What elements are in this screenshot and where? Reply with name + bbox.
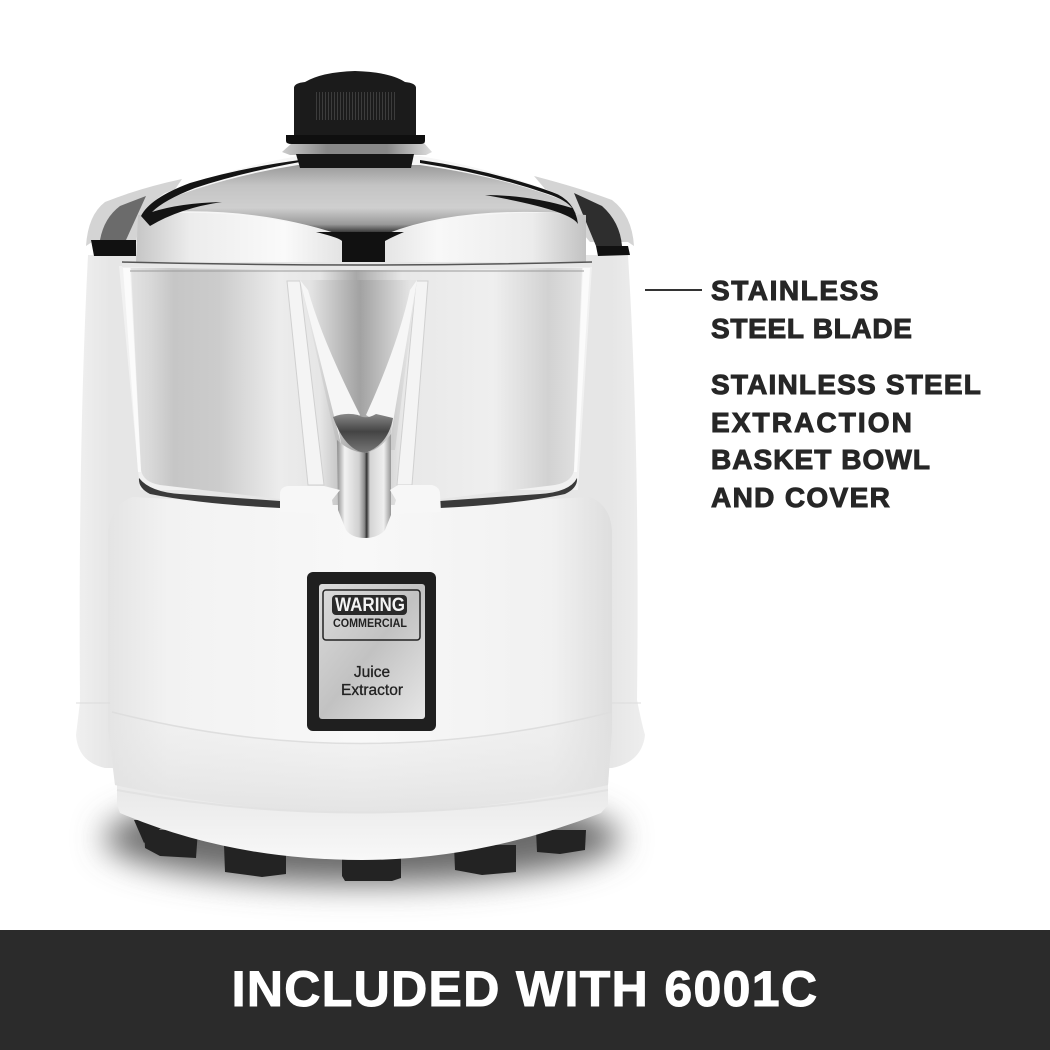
spout tube xyxy=(337,434,391,538)
label: stainless steel blade xyxy=(711,275,913,344)
dark block under knob xyxy=(296,154,414,168)
badge xyxy=(307,572,436,731)
base cylinder xyxy=(117,760,608,860)
front body xyxy=(108,497,612,812)
glass bowl edges xyxy=(119,266,592,490)
badge: Juice xyxy=(354,664,390,681)
floor shadow xyxy=(104,792,620,884)
side housing xyxy=(76,255,645,768)
banner heading: INCLUDED WITH 6001C xyxy=(232,961,818,1017)
badge: COMMERCIAL xyxy=(333,616,407,630)
logo pill xyxy=(332,595,407,615)
label: stainless steel blade: STAINLESS xyxy=(711,275,880,306)
label: stainless steel blade: STEEL BLADE xyxy=(711,312,913,344)
wing clips xyxy=(91,240,136,256)
lower body band xyxy=(110,712,612,812)
steel bowl xyxy=(131,268,582,505)
label: basket bowl and cover: BASKET BOWL xyxy=(711,444,931,475)
label: basket bowl and cover: EXTRACTION xyxy=(711,406,914,438)
white tabs xyxy=(280,486,340,514)
label: basket bowl and cover: AND COVER xyxy=(711,482,891,512)
centre black notch xyxy=(316,232,404,262)
spout channel xyxy=(287,280,428,485)
label: basket bowl and cover: STAINLESS STEEL xyxy=(711,369,982,400)
lid lower lobes xyxy=(136,213,586,262)
lid creases xyxy=(141,160,300,226)
lid dome xyxy=(136,156,586,262)
knob collar xyxy=(282,143,432,155)
label: basket bowl and cover xyxy=(711,369,982,512)
side lid wings xyxy=(86,179,182,246)
knob xyxy=(286,71,425,144)
bowl rim xyxy=(122,262,592,270)
rubber feet xyxy=(134,820,586,881)
leader line xyxy=(645,289,702,290)
badge: Extractor xyxy=(341,682,403,699)
badge: WARING xyxy=(335,595,405,616)
footer banner xyxy=(0,930,1050,1050)
lid central reflection xyxy=(146,165,577,234)
